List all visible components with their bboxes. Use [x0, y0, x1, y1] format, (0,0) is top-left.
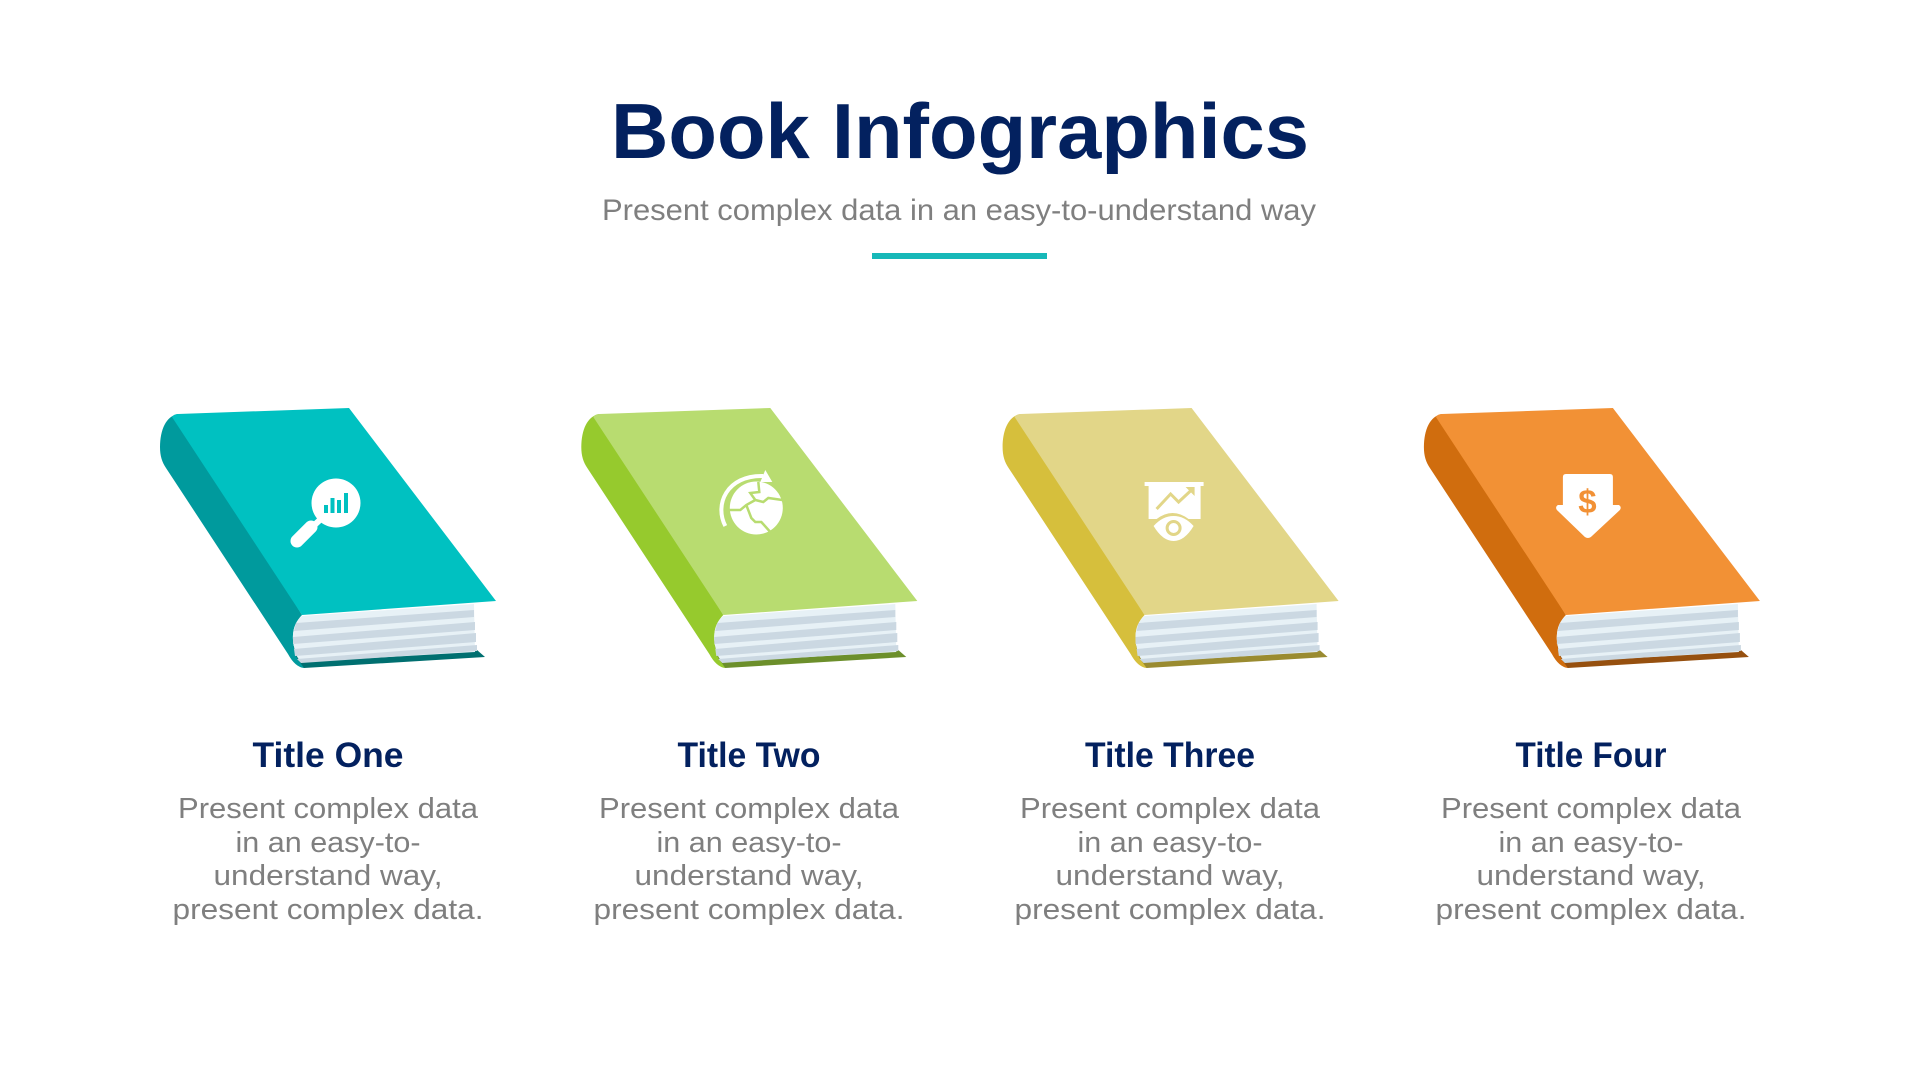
book two	[581, 408, 917, 668]
book one	[160, 408, 496, 668]
body: column four: understand way,	[1476, 860, 1706, 892]
book four	[1424, 408, 1760, 668]
body: column two: in an easy-to-	[656, 827, 842, 859]
body: column one: in an easy-to-	[236, 827, 420, 859]
body: column four: Present complex data	[1441, 793, 1742, 825]
heading: title one: Title One	[252, 736, 404, 775]
subtitle: Present complex data in an easy-to-understand way	[602, 194, 1316, 227]
body: column two: present complex data.	[594, 894, 904, 926]
accent underline	[872, 253, 1047, 259]
body: column three: in an easy-to-	[1078, 827, 1262, 859]
icon: down arrow with dollar: $	[1578, 483, 1597, 520]
column two text	[594, 736, 904, 926]
icon: globe with arrow	[721, 470, 783, 534]
book three	[1003, 408, 1339, 668]
body: column two: understand way,	[634, 860, 864, 892]
body: column three: Present complex data	[1020, 793, 1321, 825]
body: column three: understand way,	[1056, 860, 1284, 892]
body: column three	[1014, 793, 1326, 926]
body: column two: Present complex data	[599, 793, 900, 825]
title: Book Infographics	[611, 87, 1309, 175]
body: column one: present complex data.	[172, 894, 484, 926]
column four text	[1436, 736, 1746, 926]
column three text	[1014, 736, 1326, 926]
body: column one: Present complex data	[178, 793, 479, 825]
body: column two	[594, 793, 904, 926]
body: column four: in an easy-to-	[1498, 827, 1684, 859]
body: column one: understand way,	[214, 860, 442, 892]
body: column four: present complex data.	[1436, 894, 1746, 926]
body: column three: present complex data.	[1014, 894, 1326, 926]
heading: title four: Title Four	[1516, 736, 1667, 775]
icon: presentation board with eye	[1145, 482, 1204, 541]
body: column one	[172, 793, 484, 926]
body: column four	[1436, 793, 1746, 926]
column one text	[172, 736, 484, 926]
heading: title two: Title Two	[678, 736, 820, 775]
icon: magnifier with bars	[297, 478, 360, 541]
heading: title three: Title Three	[1085, 736, 1255, 775]
icon: down arrow with dollar	[1556, 474, 1621, 538]
